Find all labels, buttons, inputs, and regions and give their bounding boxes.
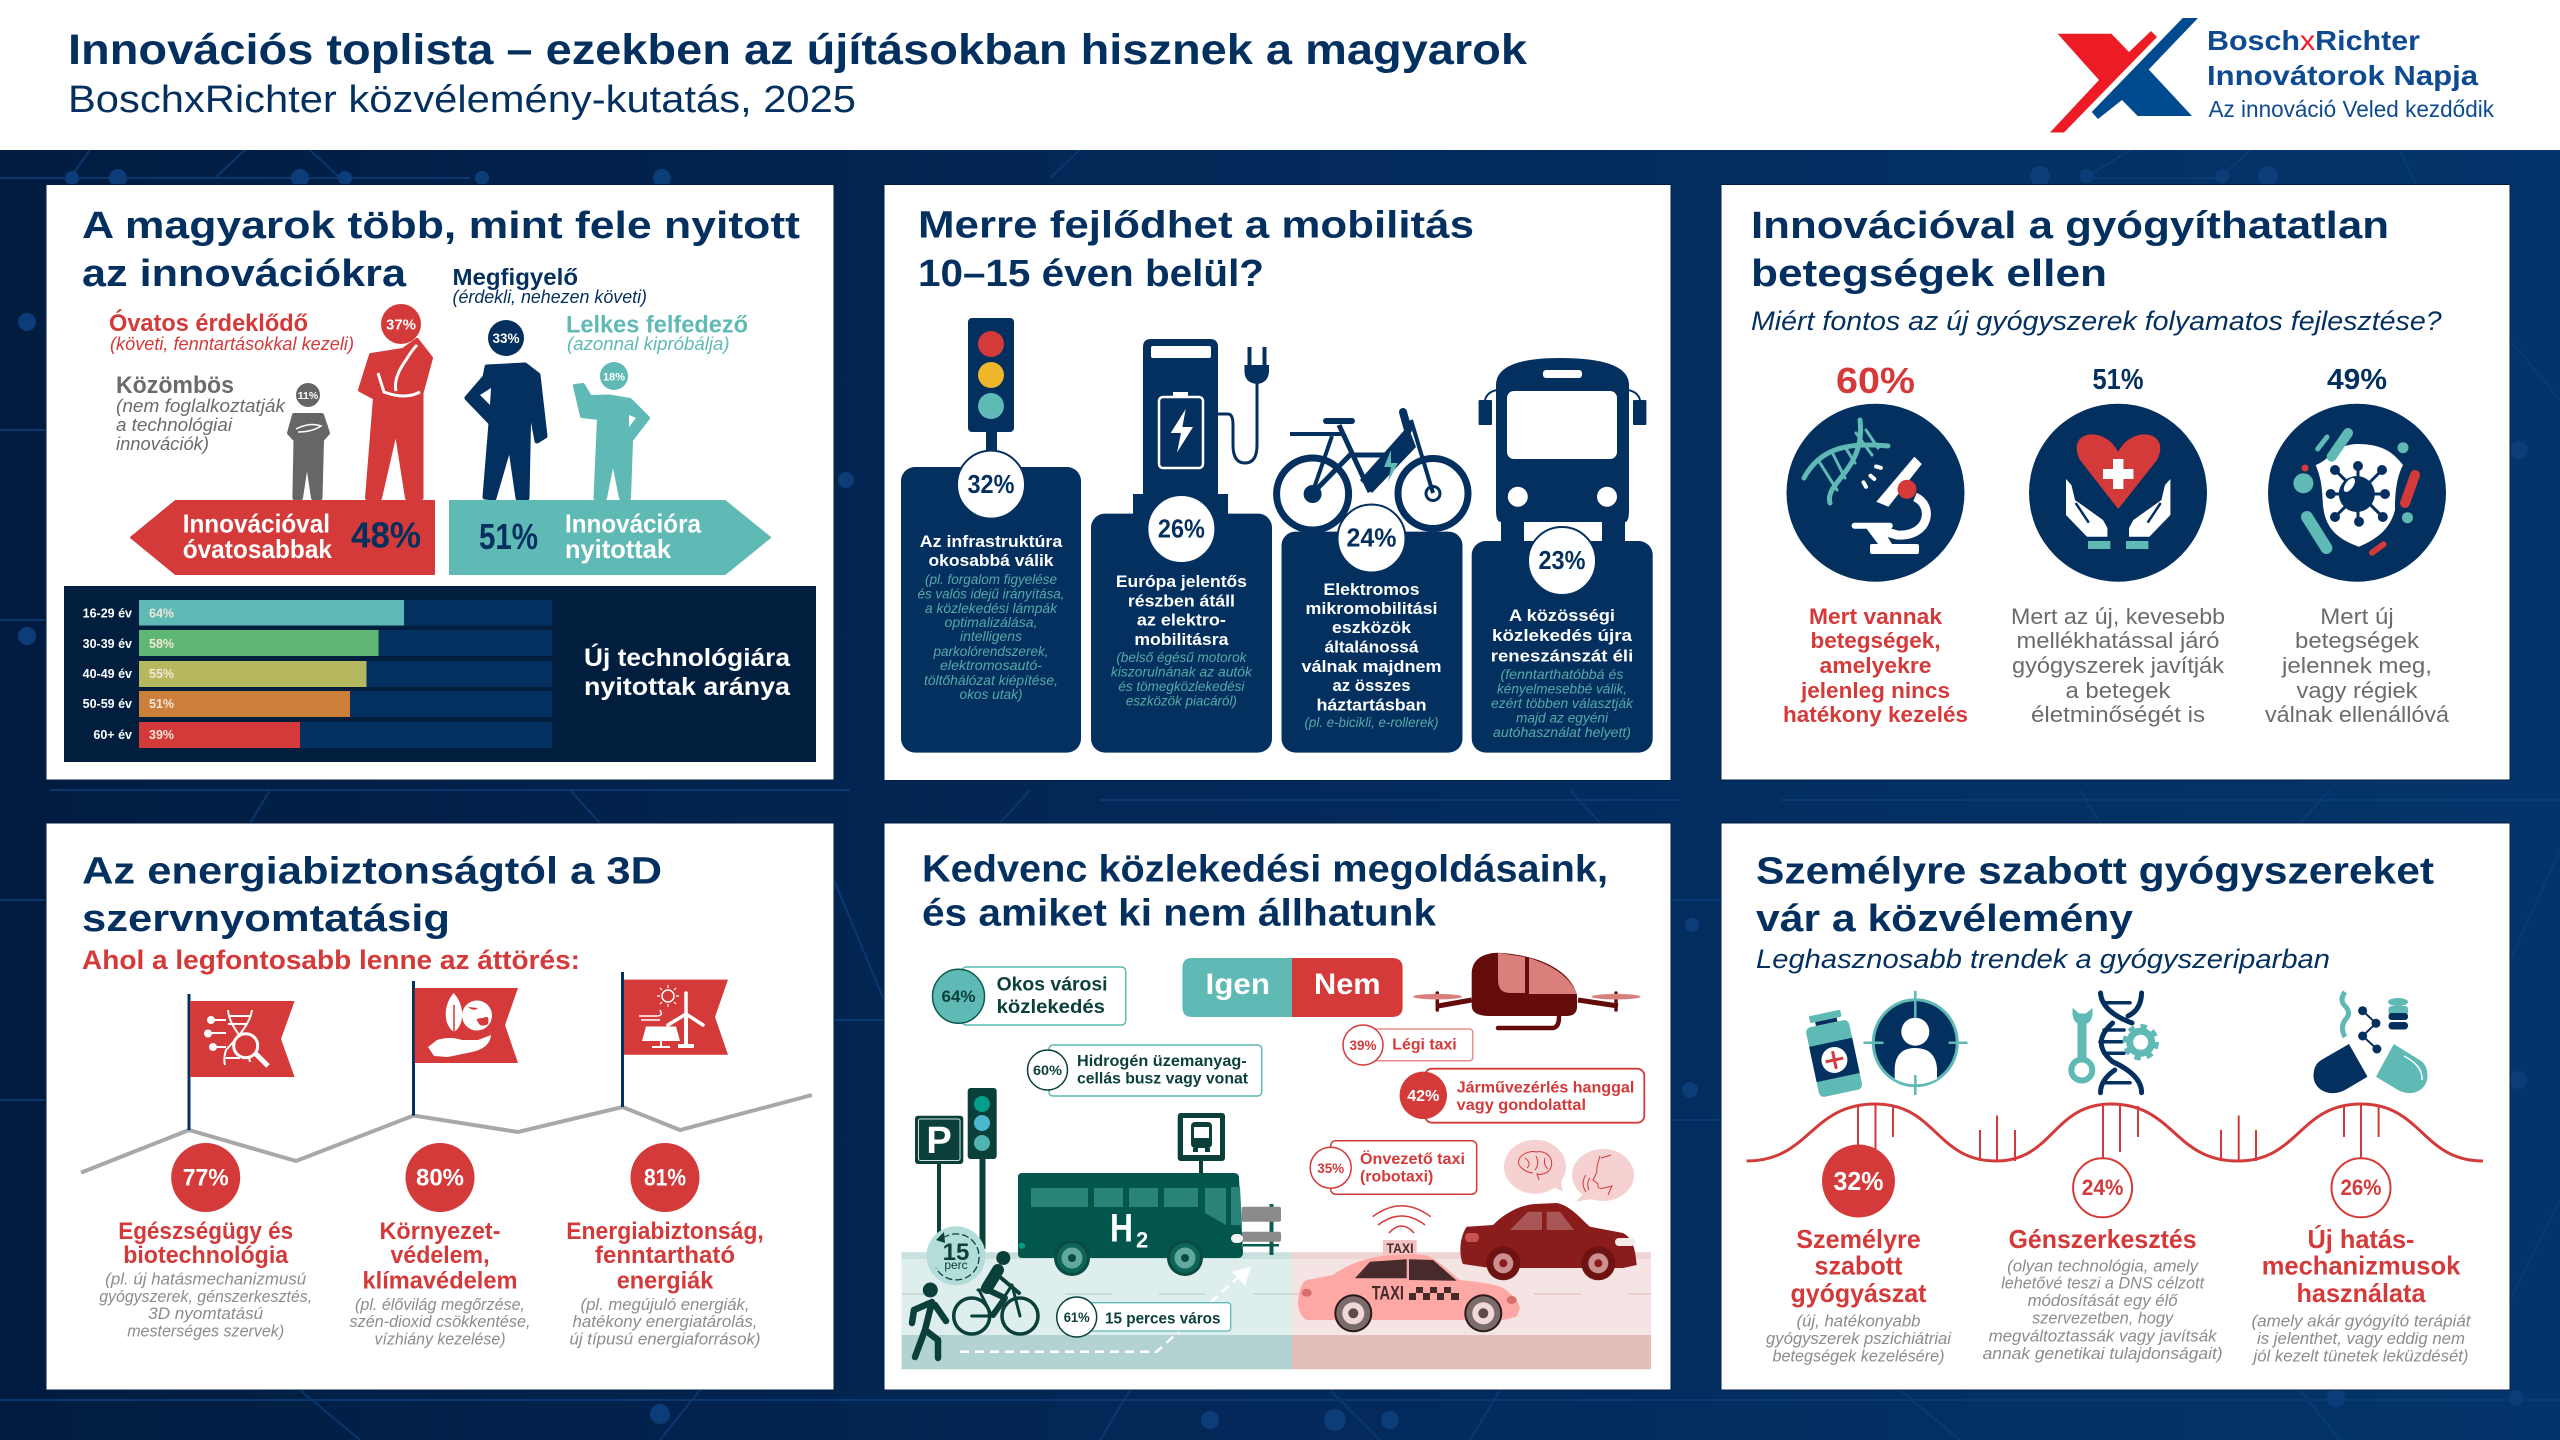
persona labels: (követi, fenntartásokkal kezeli) (110, 334, 354, 354)
stat: gene editing 24%: lehetővé teszi a DNS célzott (2001, 1275, 2205, 1293)
figure: indifferent 11% (289, 383, 328, 498)
callout: robotaxi 35% (1310, 1141, 1477, 1194)
card: smart infrastructure: optimalizálása, (944, 615, 1038, 630)
panel: innovation openness (46, 184, 834, 780)
heading: és amiket ki nem állhatunk (922, 893, 1437, 935)
reason: quality of life: gyógyszerek javítják (2012, 653, 2225, 678)
callout: hydrogen bus 60%: cellás busz vagy vonat (1077, 1071, 1248, 1088)
card: micromobility: (pl. e-bicikli, e-rollerek) (1304, 715, 1438, 730)
stat: healthcare 77%: gyógyszerek, génszerkesztés, (99, 1288, 312, 1306)
icon: self-driving taxi (1298, 1206, 1520, 1332)
callout: air taxi 39%: Légi taxi (1392, 1036, 1457, 1053)
reason: quality of life (2011, 364, 2225, 727)
panel: mobility (884, 184, 1671, 780)
bar chart: age groups: nyitottak aránya (584, 673, 791, 701)
card: micromobility: általánossá (1324, 638, 1419, 657)
heading: vár a közvélemény (1756, 898, 2133, 940)
card: public transport: 23% (1538, 545, 1586, 575)
stat: gene editing 24% (1983, 1158, 2223, 1363)
stat: energy 81% (566, 1143, 764, 1348)
icon: traffic light (968, 318, 1014, 452)
icon: self-driving taxi: TAXI (1372, 1283, 1404, 1304)
stat: environment 80%: Környezet- (380, 1218, 500, 1245)
heading: A magyarok több, mint fele nyitott (82, 205, 800, 247)
heading: betegségek ellen (1751, 253, 2107, 295)
icon: bus (1479, 358, 1646, 541)
figure: observer 33% (467, 320, 545, 498)
persona labels: (azonnal kipróbálja) (567, 334, 730, 354)
reason: resistance: vagy régiek (2296, 678, 2419, 703)
card: electromobility: az elektro- (1137, 611, 1226, 630)
card: smart infrastructure: a közlekedési lámpák (925, 601, 1058, 616)
heading (1756, 851, 2434, 940)
stat: new mechanisms 26% (2251, 1158, 2472, 1366)
card: electromobility: 26% (1158, 514, 1205, 544)
heading (82, 851, 662, 940)
card: public transport: autóhasználat helyett) (1493, 725, 1631, 740)
subtitle: Miért fontos az új gyógyszerek folyamatos fejlesztése? (1751, 306, 2442, 336)
bar chart: age groups: 51% (149, 697, 174, 711)
card: smart infrastructure: okos utak) (960, 687, 1022, 702)
heading: Az energiabiztonságtól a 3D (82, 851, 662, 893)
flag: environment (412, 981, 518, 1116)
card: micromobility: 24% (1346, 522, 1396, 552)
stat: healthcare 77%: mesterséges szervek) (127, 1323, 284, 1341)
logo: Innovátorok Napja (2207, 60, 2478, 91)
header band (0, 0, 2560, 150)
persona labels: (nem foglalkoztatják (116, 396, 286, 416)
stat: healthcare 77%: biotechnológia (123, 1242, 289, 1269)
persona labels: Megfigyelő (452, 264, 578, 290)
icon: pedestrian (912, 1282, 946, 1358)
arrow: open 51%: Innovációra (565, 508, 701, 538)
heading (922, 849, 1608, 935)
callout: hydrogen bus 60%: 60% (1033, 1062, 1063, 1078)
logo: Bosch xRichter (2207, 25, 2420, 56)
arrow: open 51%: nyitottak (565, 534, 672, 564)
stat: new mechanisms 26%: Új hatás- (2308, 1224, 2414, 1254)
bar chart: age groups (64, 586, 816, 762)
bar chart: age groups: 55% (149, 667, 174, 681)
reason: quality of life: a betegek (2066, 678, 2172, 703)
callout: voice and thought control 42% (1400, 1069, 1644, 1123)
bar chart: age groups: 39% (149, 728, 174, 742)
callout: voice and thought control 42%: Járművezérlés hanggal (1457, 1080, 1634, 1097)
stat: environment 80%: vízhiány kezelése) (374, 1330, 506, 1348)
reason: resistance: válnak ellenállóvá (2265, 702, 2450, 727)
stat: gene editing 24%: módosítását egy élő (2028, 1292, 2178, 1310)
reason: resistance: 49% (2327, 364, 2387, 396)
card: smart infrastructure: intelligens (960, 629, 1022, 644)
card: electromobility (1091, 495, 1272, 753)
subheading: Ahol a legfontosabb lenne az áttörés: (82, 945, 580, 975)
card: electromobility: Európa jelentős (1116, 572, 1247, 591)
logo: Az innováció Veled kezdődik (2208, 96, 2494, 122)
icon: hydrogen bus: 2 (1136, 1228, 1148, 1253)
icon: parking sign: P (926, 1120, 952, 1162)
card: micromobility: eszközök (1332, 618, 1412, 637)
icon: medicine bottle and target person (1803, 991, 1968, 1098)
flag: health (188, 994, 295, 1130)
heading (918, 204, 1474, 295)
reason: incurable diseases: jelenleg nincs (1800, 678, 1950, 703)
callout: 15 minute city 61% (1057, 1297, 1231, 1337)
icon: brain and voice bubbles (1504, 1140, 1634, 1202)
stat: healthcare 77%: 77% (183, 1165, 229, 1192)
stat: personalised medicine 32%: Személyre (1796, 1224, 1921, 1254)
card: public transport: kényelmesebbé válik, (1497, 682, 1627, 696)
reason: incurable diseases: Mert vannak (1809, 604, 1943, 629)
heading: szervnyomtatásig (82, 898, 450, 940)
card: electromobility: mobilitásra (1134, 630, 1229, 649)
figure: observer 33%: 33% (492, 331, 520, 346)
icon: green traffic light (968, 1088, 997, 1249)
card: micromobility: mikromobilitási (1306, 599, 1438, 618)
bar chart: age groups: Új technológiára (584, 642, 791, 672)
card: smart infrastructure: (pl. forgalom figyelése (925, 572, 1057, 587)
callout: 15 minute city 61%: 15 perces város (1105, 1311, 1221, 1328)
persona labels: (érdekli, nehezen követi) (452, 287, 647, 307)
stat: energy 81%: új típusú energiaforrások) (570, 1330, 760, 1348)
stat: personalised medicine 32%: 32% (1834, 1166, 1884, 1196)
card: smart infrastructure: Az infrastruktúra (920, 532, 1063, 551)
callout: smart city transport 64% (932, 967, 1126, 1025)
heading (82, 205, 800, 295)
arrow: cautious 48%: 48% (351, 515, 421, 556)
stat: new mechanisms 26%: mechanizmusok (2262, 1251, 2461, 1281)
arrow: open 51%: 51% (479, 516, 538, 557)
card: public transport: (fenntarthatóbbá és (1500, 667, 1624, 682)
badge: 15 minutes (926, 1226, 986, 1285)
stat: environment 80%: védelem, (390, 1242, 490, 1269)
callout: air taxi 39%: 39% (1350, 1037, 1377, 1053)
figure: enthusiast 18%: 18% (603, 372, 625, 384)
figure: enthusiast 18% (575, 362, 648, 498)
road scene background (902, 1252, 1651, 1369)
icon: bus stop sign (1178, 1113, 1225, 1174)
badge: 15 minutes: perc (944, 1258, 968, 1272)
callout: robotaxi 35%: Önvezető taxi (1360, 1149, 1465, 1168)
card: micromobility: Elektromos (1324, 580, 1420, 599)
stat: environment 80%: 80% (416, 1165, 464, 1192)
persona labels: Óvatos érdeklődő (109, 309, 308, 337)
icon: cyclist (954, 1251, 1038, 1334)
callout: hydrogen bus 60%: Hidrogén üzemanyag- (1077, 1053, 1247, 1070)
persona labels (109, 264, 748, 454)
title: Innovációs toplista – ezekben az újításokban hisznek a magyarok (68, 26, 1527, 74)
reason: incurable diseases (1783, 360, 1968, 727)
stat: energy 81%: 81% (644, 1165, 686, 1192)
figure: indifferent 11%: 11% (298, 390, 319, 402)
icon: air taxi (1413, 953, 1640, 1028)
logo (2050, 18, 2494, 132)
badge: 15 minutes: 15 (943, 1239, 969, 1266)
card: micromobility: válnak majdnem (1302, 657, 1442, 676)
stat: new mechanisms 26%: jól kezelt tünetek leküzdését) (2251, 1348, 2468, 1366)
reason: resistance (2265, 364, 2450, 727)
stat: gene editing 24%: (olyan technológia, amely (2007, 1257, 2200, 1275)
heading: Merre fejlődhet a mobilitás (918, 204, 1474, 246)
stat: personalised medicine 32%: (új, hatékonyabb (1796, 1312, 1920, 1330)
icon: parking sign (915, 1116, 963, 1234)
card: public transport (1472, 527, 1653, 753)
legend: yes / no: Igen (1206, 968, 1270, 1001)
reason: incurable diseases: amelyekre (1820, 653, 1932, 678)
icon: e-bike (1277, 412, 1468, 530)
figure: cautious 37% (360, 304, 431, 498)
icon: capsule and molecules (2313, 992, 2428, 1093)
card: smart infrastructure: okosabbá válik (928, 551, 1054, 570)
card: smart infrastructure: és valós idejű irányítása, (918, 586, 1064, 601)
persona labels: Lelkes felfedező (566, 312, 748, 338)
stat: gene editing 24%: 24% (2082, 1175, 2123, 1200)
reason: quality of life: 51% (2092, 364, 2144, 396)
heading: Innovációval a gyógyíthatatlan (1751, 205, 2389, 247)
callout: smart city transport 64%: 64% (941, 987, 976, 1006)
card: smart infrastructure: parkolórendszerek, (932, 644, 1048, 659)
callout: robotaxi 35%: (robotaxi) (1360, 1169, 1433, 1186)
stat: gene editing 24%: Génszerkesztés (2009, 1224, 2197, 1254)
card: smart infrastructure: elektromosautó- (940, 658, 1043, 673)
stat: energy 81%: Energiabiztonság, (566, 1218, 764, 1245)
stat: gene editing 24%: annak genetikai tulajdonságait) (1983, 1345, 2223, 1363)
subtitle: Leghasznosabb trendek a gyógyszeriparban (1756, 944, 2330, 974)
bar chart: age groups: 40-49 év (83, 667, 132, 681)
card: electromobility: és tömegközlekedési (1118, 679, 1245, 694)
card: public transport: ezért többen választják (1491, 696, 1634, 711)
rising line chart (81, 1095, 812, 1173)
card: micromobility: háztartásban (1316, 695, 1426, 714)
flag: energy (621, 972, 728, 1107)
card: public transport: reneszánszát éli (1491, 646, 1633, 665)
bar chart: age groups: 50-59 év (83, 697, 132, 711)
callout: smart city transport 64%: Okos városi (997, 975, 1108, 996)
icon: red car (1460, 1203, 1637, 1280)
stat: new mechanisms 26%: használata (2296, 1278, 2426, 1308)
callout: robotaxi 35%: 35% (1317, 1160, 1345, 1176)
legend: yes / no: Nem (1314, 968, 1381, 1001)
heading (1751, 205, 2389, 295)
icon: gene editing (2071, 993, 2157, 1093)
stat: healthcare 77%: (pl. új hatásmechanizmusú (105, 1270, 306, 1288)
card: electromobility: (belső égésű motorok (1116, 650, 1248, 665)
callout: air taxi 39% (1343, 1025, 1473, 1065)
chart: red helix (1747, 1104, 2483, 1162)
reason: resistance: Mert új (2320, 604, 2394, 629)
stat: healthcare 77%: 3D nyomtatású (148, 1305, 263, 1323)
panel: favourite transport (884, 823, 1671, 1390)
card: electromobility: részben átáll (1128, 591, 1235, 610)
persona labels: Közömbös (116, 372, 234, 399)
stat: personalised medicine 32%: szabott (1814, 1251, 1903, 1281)
arrow: open 51% (450, 501, 770, 574)
icon: self-driving taxi: TAXI (1386, 1241, 1414, 1256)
panel: breakthroughs (46, 823, 834, 1390)
panel: personalised medicine (1721, 823, 2510, 1390)
card: electromobility: eszközök piacáról) (1126, 694, 1237, 709)
stat: gene editing 24%: szervezetben, hogy (2032, 1310, 2175, 1328)
callout: 15 minute city 61%: 61% (1064, 1309, 1090, 1325)
icon: bench (1242, 1204, 1281, 1255)
stat: personalised medicine 32%: gyógyszerek pszichiátriai (1766, 1330, 1952, 1348)
bar chart: age groups: 30-39 év (83, 637, 132, 651)
panel: new medicines (1721, 184, 2510, 780)
stat: environment 80% (350, 1143, 530, 1348)
arrow: cautious 48% (131, 501, 434, 574)
stat: personalised medicine 32%: gyógyászat (1790, 1278, 1927, 1308)
stat: environment 80%: klímavédelem (362, 1268, 518, 1295)
arrow: cautious 48%: Innovációval (183, 508, 330, 538)
bar chart: age groups: 64% (149, 606, 174, 620)
heading: az innovációkra (82, 253, 407, 295)
legend: yes / no (1182, 958, 1403, 1017)
arrow: cautious 48%: óvatosabbak (183, 534, 332, 564)
stat: personalised medicine 32% (1766, 1144, 1952, 1366)
card: public transport: közlekedés újra (1492, 626, 1633, 645)
callout: smart city transport 64%: közlekedés (997, 997, 1105, 1018)
card: public transport: A közösségi (1509, 606, 1615, 625)
heading: Személyre szabott gyógyszereket (1756, 851, 2434, 893)
reason: incurable diseases: betegségek, (1810, 628, 1940, 653)
stat: energy 81%: fenntartható (595, 1242, 735, 1269)
card: public transport: majd az egyéni (1516, 710, 1609, 726)
heading: 10–15 éven belül? (918, 253, 1264, 295)
reason: incurable diseases: hatékony kezelés (1783, 702, 1968, 727)
stat: environment 80%: (pl. élővilág megőrzése, (355, 1296, 525, 1314)
bar chart: age groups: 16-29 év (83, 606, 132, 620)
stat: personalised medicine 32%: betegségek kezelésére) (1772, 1348, 1944, 1366)
card: micromobility (1282, 504, 1462, 753)
icon: charger (1133, 339, 1269, 514)
figure: cautious 37%: 37% (386, 316, 416, 334)
icon: hydrogen bus: H (1110, 1207, 1133, 1251)
card: smart infrastructure: töltőhálózat kiépítése, (924, 673, 1058, 688)
bar chart: age groups: 58% (149, 637, 174, 651)
card: electromobility: kiszorulnának az autók (1111, 665, 1253, 680)
icon: dashed route arrow (960, 1267, 1251, 1352)
reason: incurable diseases: 60% (1836, 360, 1915, 401)
stat: healthcare 77% (99, 1143, 312, 1341)
reason: quality of life: életminőségét is (2031, 702, 2205, 727)
stat: healthcare 77%: Egészségügy és (118, 1218, 293, 1245)
callout: voice and thought control 42%: vagy gondolattal (1457, 1097, 1586, 1114)
subtitle: BoschxRichter közvélemény-kutatás, 2025 (68, 79, 856, 121)
card: smart infrastructure: 32% (968, 469, 1014, 499)
card: micromobility: az összes (1332, 676, 1410, 695)
reason: resistance: jelennek meg, (2281, 653, 2432, 678)
persona labels: a technológiai (116, 415, 233, 435)
stat: gene editing 24%: megváltoztassák vagy javítsák (1989, 1328, 2217, 1346)
persona labels: innovációk) (116, 434, 209, 454)
stat: energy 81%: energiák (617, 1268, 714, 1295)
callout: voice and thought control 42%: 42% (1407, 1088, 1439, 1105)
card: smart infrastructure (901, 451, 1081, 753)
stat: environment 80%: szén-dioxid csökkentése, (350, 1313, 530, 1331)
bar chart: age groups: 60+ év (93, 728, 132, 742)
reason: quality of life: mellékhatással járó (2016, 628, 2220, 653)
stat: energy 81%: (pl. megújuló energiák, (580, 1296, 750, 1314)
stat: new mechanisms 26%: is jelenthet, vagy eddig nem (2257, 1330, 2465, 1348)
reason: quality of life: Mert az új, kevesebb (2011, 604, 2225, 629)
reason: resistance: betegségek (2295, 628, 2420, 653)
stat: new mechanisms 26%: (amely akár gyógyító terápiát (2252, 1312, 2472, 1330)
callout: hydrogen bus 60% (1028, 1045, 1262, 1096)
heading: Kedvenc közlekedési megoldásaink, (922, 849, 1608, 891)
icon: hydrogen bus (1018, 1173, 1243, 1276)
stat: energy 81%: hatékony energiatárolás, (572, 1313, 758, 1331)
stat: new mechanisms 26%: 26% (2340, 1175, 2382, 1200)
